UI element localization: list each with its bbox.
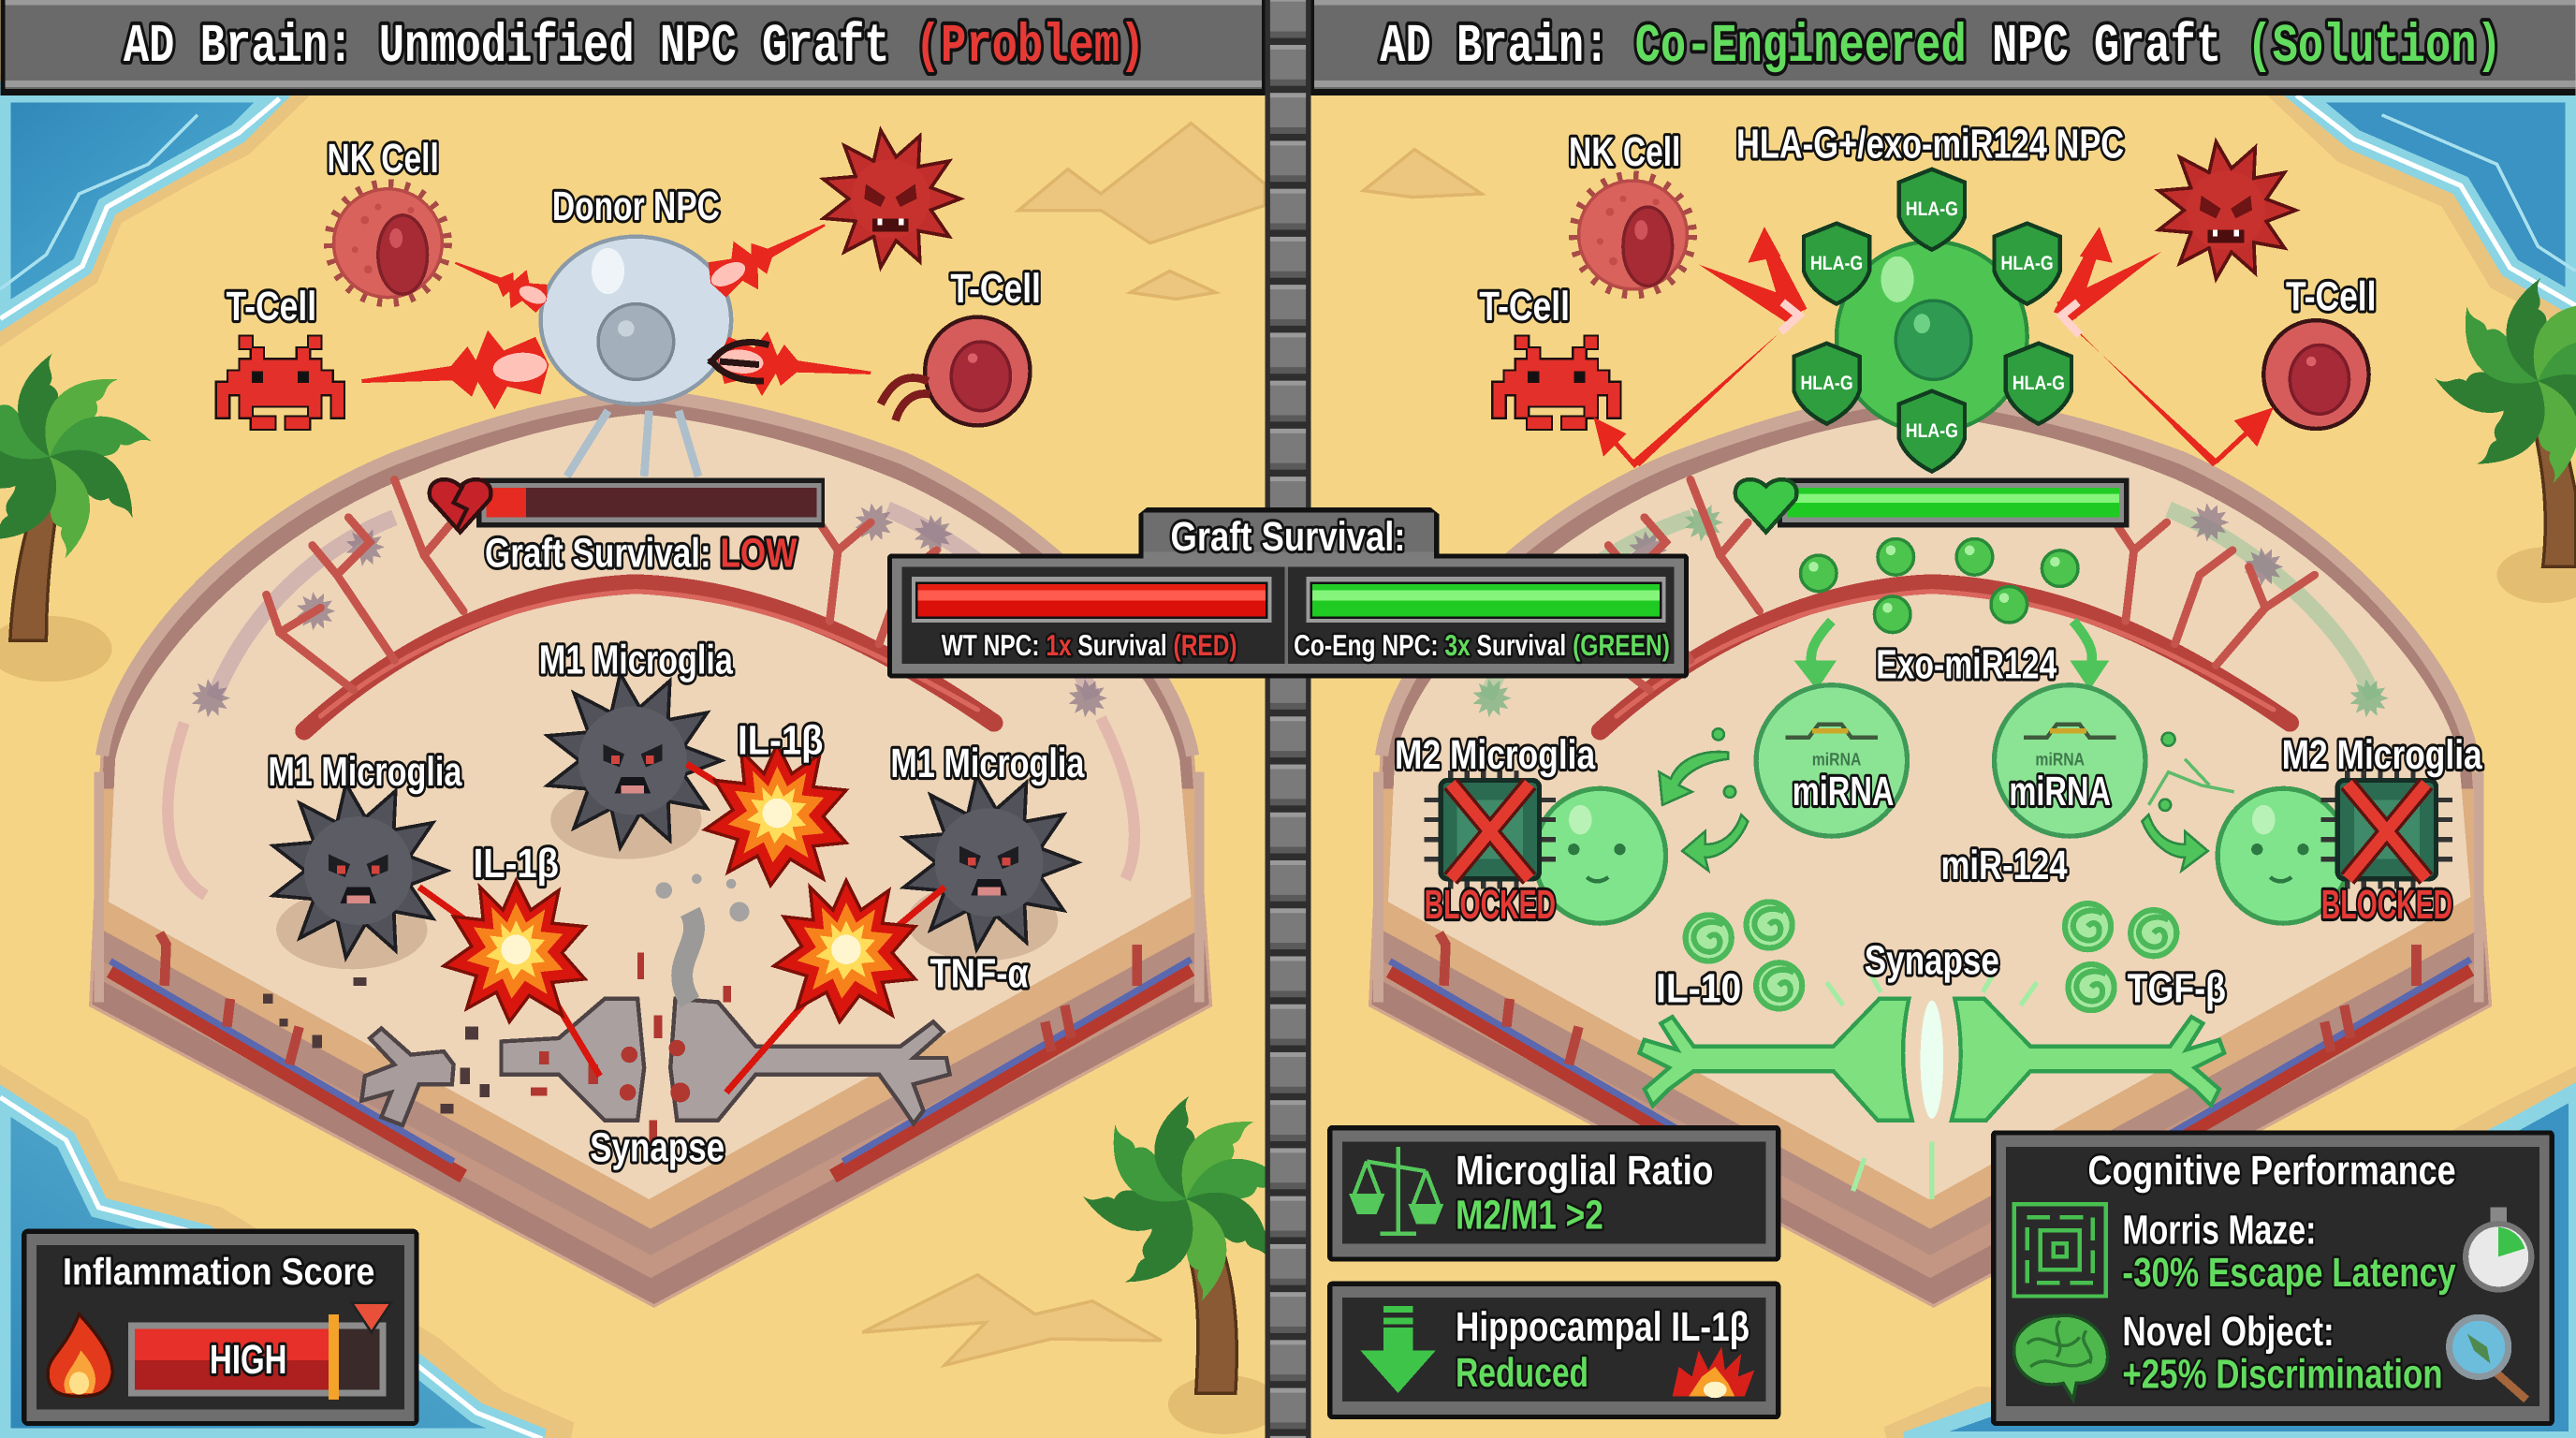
background: left beach sand [0, 0, 1288, 1438]
label: TNF-α: TNF-α [929, 951, 1030, 997]
label: M1 top: M1 Microglia [539, 638, 734, 683]
label: graft survival low: Graft Survival: LOW [485, 531, 798, 577]
brain tissue dish: left [91, 394, 1211, 1306]
label: engineered NPC: HLA-G+/exo-miR124 NPC [1736, 122, 2124, 168]
miRNA vesicle: left [1756, 685, 1908, 836]
stone divider [1265, 0, 1311, 1438]
miRNA vesicle: right: miRNA [2009, 769, 2111, 814]
background: right beach sand [1288, 0, 2576, 1438]
label: M2 right: M2 Microglia [2282, 733, 2483, 779]
text: microglial ratio title: Microglial Ratio [1456, 1149, 1713, 1195]
miRNA vesicle: right: miRNA [2035, 751, 2085, 770]
healthy synapse [1640, 969, 2224, 1199]
NK cell: right [1573, 176, 1692, 294]
microglia: left M1 [273, 784, 447, 969]
text: WT NPC survival: WT NPC: 1x Survival (RED) [942, 629, 1237, 662]
icon: down arrow [1360, 1306, 1436, 1393]
icon: shield lower left [1793, 344, 1860, 424]
panel: hippocampal IL-1β [1327, 1282, 1780, 1419]
neural tracts: right [1472, 503, 2389, 717]
microglia: top M1 [548, 674, 722, 859]
T-cell round: right [2263, 320, 2369, 429]
anti-inflammatory cytokines [1686, 902, 2176, 1010]
donor NPC cell [541, 237, 731, 477]
label: Synapse right: Synapse [1865, 938, 1999, 984]
sand dunes [863, 124, 1482, 1365]
label: IL-1β left: IL-1β [474, 841, 559, 888]
text: discrimination: +25% Discrimination [2122, 1352, 2443, 1398]
panel: microglial ratio [1327, 1125, 1780, 1262]
damaged synapse [263, 874, 950, 1143]
text: reduced: Reduced [1456, 1350, 1588, 1397]
label: NK Cell left: NK Cell [327, 137, 439, 183]
icon: small explosion [1673, 1347, 1754, 1398]
water: bottom-right shore [1889, 1081, 2576, 1438]
icon: shield lower right [2006, 344, 2071, 424]
label: BLOCKED right: BLOCKED [2321, 882, 2452, 928]
icon: green heart [1735, 479, 1796, 533]
panel: inflammation score [22, 1229, 419, 1426]
miRNA vesicle: left: miRNA [1812, 751, 1861, 770]
label: NK Cell right: NK Cell [1569, 130, 1680, 176]
blood vessels: left [267, 479, 1018, 731]
icon: shield upper right [1995, 224, 2060, 304]
water: bottom-left shore [0, 1086, 567, 1438]
icon: shield lower left: HLA-G [1800, 372, 1853, 394]
icon: shield top [1899, 169, 1965, 250]
text: co-eng NPC survival: Co-Eng NPC: 3x Survival (GREEN) [1294, 629, 1670, 662]
survival bar: high [1735, 478, 2129, 533]
icon: balance scale [1352, 1147, 1441, 1234]
heading: inflammation score: Inflammation Score [63, 1250, 374, 1293]
text: hippocampal title: Hippocampal IL-1β [1456, 1304, 1749, 1350]
icon: maze [2014, 1204, 2106, 1296]
panel: central graft survival comparison [887, 507, 1689, 679]
label: miR-124: miR-124 [1941, 843, 2068, 888]
engineered NPC cell with shields [1793, 169, 2071, 472]
arrows: exosome delivery [1793, 621, 2109, 690]
cytokine explosion: left [419, 881, 600, 1076]
icon: shield bottom: HLA-G [1906, 418, 1958, 442]
bar: co-engineered NPC green [1306, 577, 1666, 623]
icon: green brain [2014, 1315, 2108, 1400]
palm tree: right [2432, 275, 2576, 603]
palm tree: bottom centre [1080, 1093, 1290, 1434]
gauge: high [128, 1302, 391, 1400]
label: M1 left: M1 Microglia [268, 749, 463, 795]
neural tracts: left [168, 503, 1134, 895]
blocked chip: left [1425, 770, 1556, 888]
header bar: left [0, 0, 1265, 95]
heading: cognitive performance: Cognitive Performance [2088, 1149, 2456, 1195]
M2 microglia: right [2217, 788, 2349, 923]
label: T-Cell right panel right: T-Cell [2286, 274, 2377, 320]
exosome orbs [1800, 539, 2078, 633]
palm tree: left [0, 351, 154, 682]
text: escape latency: -30% Escape Latency [2122, 1250, 2456, 1296]
blood vessels: right [1562, 479, 2315, 731]
label: M2 left: M2 Microglia [1395, 733, 1597, 779]
icon: broken heart [430, 479, 490, 533]
label: Donor NPC: Donor NPC [552, 184, 720, 230]
virus attacker: right [2159, 142, 2296, 279]
virus attacker: left [824, 130, 960, 267]
label: T-Cell right panel left: T-Cell [1479, 285, 1570, 330]
T-cell invader: right [1493, 337, 1619, 429]
label: TGF-β: TGF-β [2128, 966, 2226, 1012]
label: BLOCKED left: BLOCKED [1425, 882, 1556, 928]
curved arrows to microglia [1660, 728, 2234, 871]
title: right: AD Brain: Co-Engineered NPC Graft (Solution) [1380, 17, 2502, 77]
icon: shield upper left [1804, 224, 1869, 304]
label: Exo-miR124: Exo-miR124 [1876, 642, 2056, 688]
title: left: AD Brain: Unmodified NPC Graft (Problem) [124, 17, 1145, 77]
text: novel object: Novel Object: [2122, 1310, 2334, 1356]
NK cell: left [329, 184, 447, 302]
icon: shield bottom [1899, 391, 1965, 472]
miRNA vesicle: right [1995, 685, 2145, 836]
T-cell invader: left [217, 337, 344, 429]
attack rays on NPC [359, 201, 873, 420]
label: IL-1β top: IL-1β [738, 718, 823, 764]
water: top-right shore [2290, 92, 2576, 312]
icon: shield lower right: HLA-G [2012, 372, 2065, 394]
icon: magnifier [2450, 1317, 2526, 1400]
survival bar: low [430, 478, 825, 533]
bar: WT NPC red [912, 577, 1271, 623]
cytokine explosion: right [726, 881, 944, 1093]
blocked chip: right [2321, 770, 2452, 888]
label: M1 right: M1 Microglia [890, 741, 1086, 787]
text: morris maze: Morris Maze: [2122, 1208, 2316, 1254]
M2 microglia: left [1534, 788, 1666, 923]
cytokine explosion: top [687, 744, 846, 886]
icon: shield upper right: HLA-G [2001, 251, 2054, 274]
T-cell round: left [881, 317, 1031, 425]
microglia: right M1 [904, 775, 1077, 961]
gauge: high: HIGH [210, 1337, 286, 1383]
label: IL-10: IL-10 [1656, 966, 1741, 1012]
panel: cognitive performance [1991, 1130, 2554, 1426]
deflected rays [1593, 227, 2274, 466]
water: top-left shore [0, 92, 287, 325]
label: T-Cell right of left panel: T-Cell [950, 266, 1041, 312]
label: T-Cell left: T-Cell [227, 285, 316, 330]
icon: shield top: HLA-G [1906, 198, 1958, 220]
icon: shield upper left: HLA-G [1810, 251, 1863, 274]
icon: stopwatch [2466, 1208, 2531, 1289]
heading: graft survival: Graft Survival: [1171, 514, 1405, 560]
label: Synapse left: Synapse [590, 1125, 724, 1171]
text: M2/M1: M2/M1 >2 [1456, 1193, 1603, 1239]
miRNA vesicle: left: miRNA [1793, 769, 1894, 814]
icon: flame [48, 1314, 112, 1397]
brain tissue dish: right [1370, 394, 2490, 1306]
header bar: right [1311, 0, 2576, 95]
